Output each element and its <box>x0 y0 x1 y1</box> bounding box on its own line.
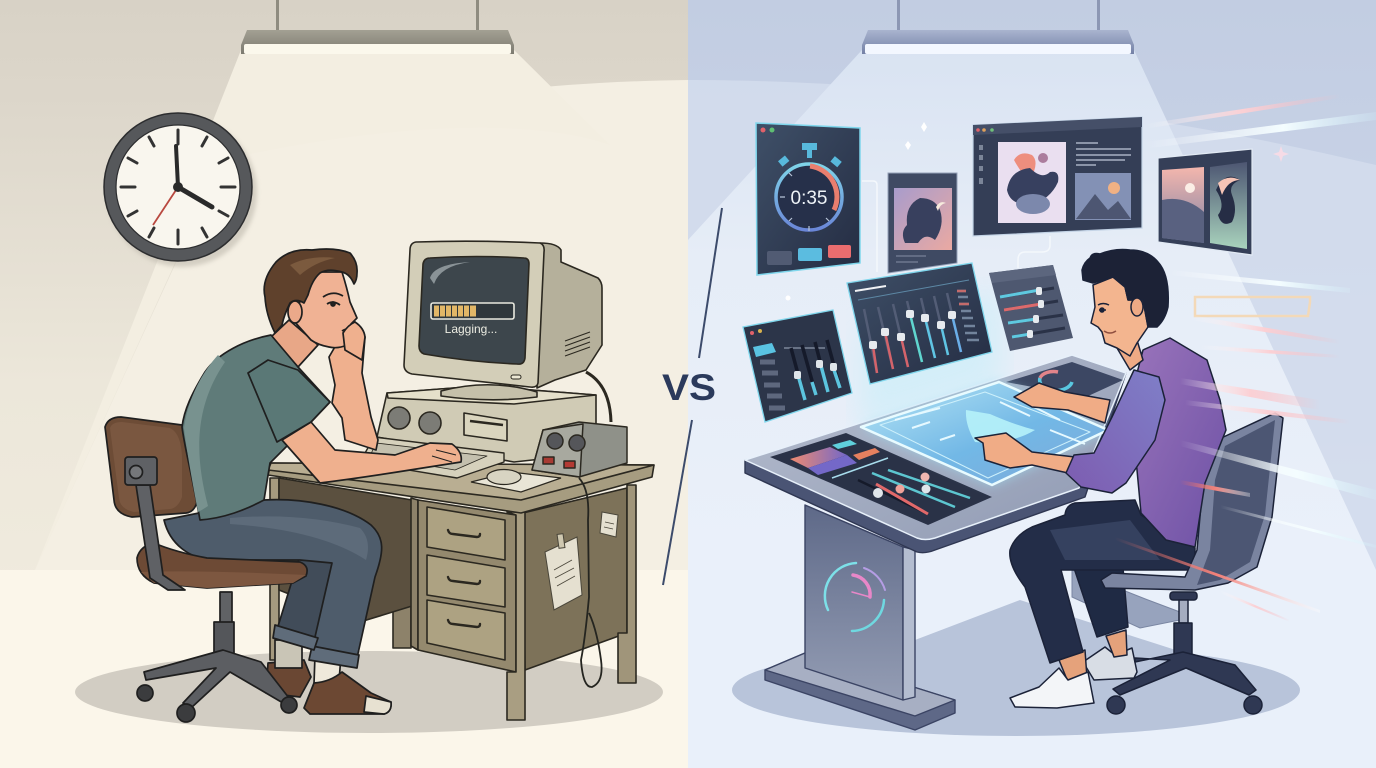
neck <box>1117 340 1143 370</box>
near shoe <box>1010 668 1094 708</box>
timer text: 0:35 <box>791 188 827 209</box>
divider: lower slash <box>663 420 692 585</box>
chair shell <box>1101 413 1283 590</box>
face <box>1091 277 1148 356</box>
ear <box>1131 298 1143 316</box>
control box <box>532 422 627 477</box>
near ankle <box>1059 650 1087 682</box>
computer base unit <box>377 386 596 462</box>
back desk foot <box>1072 570 1180 628</box>
near sock <box>314 655 341 684</box>
chair post <box>136 485 185 590</box>
desk: old wooden desk <box>268 463 654 720</box>
jeans <box>164 500 382 658</box>
faders <box>864 293 961 373</box>
mouth <box>1104 331 1116 333</box>
far leg <box>1074 568 1128 637</box>
hair <box>264 249 357 333</box>
back panel <box>1006 362 1123 397</box>
far leg <box>275 555 336 648</box>
text lines <box>1076 143 1131 165</box>
lamp: right ceiling light <box>862 0 1134 54</box>
near arm <box>975 433 1075 473</box>
hologram beam <box>860 290 1000 430</box>
notes: pinned papers on desk <box>545 512 618 610</box>
raised arm <box>329 322 378 450</box>
desk: holographic console <box>745 290 1126 553</box>
floor shadow: left <box>75 651 663 733</box>
window: image card <box>888 173 957 273</box>
versus label: VS <box>662 367 716 408</box>
eye and brow <box>323 293 343 305</box>
holographic glow <box>861 382 1108 485</box>
mouse and mousepad <box>471 470 561 492</box>
lower arm <box>282 422 461 483</box>
connector lines between windows <box>862 181 1050 272</box>
artwork <box>998 142 1066 223</box>
landscape thumbnail <box>1075 173 1131 220</box>
buttons <box>767 245 851 265</box>
left panel: slow workspace background <box>0 0 688 768</box>
near shoe <box>304 672 391 714</box>
sweater <box>1130 338 1226 547</box>
monitor housing <box>537 243 602 388</box>
progress bar <box>431 303 514 319</box>
window: artwork editor <box>973 117 1142 236</box>
window: stopwatch panel <box>756 123 860 275</box>
stopwatch icon <box>776 143 842 231</box>
person: frustrated man <box>105 249 461 722</box>
pedestal: futuristic desk base <box>765 505 955 730</box>
loading text: Lagging... <box>445 322 497 336</box>
face <box>293 272 357 348</box>
cable: monitor <box>586 372 611 422</box>
window: small sliders panel <box>743 310 852 422</box>
neck <box>271 320 318 367</box>
chair base <box>1107 592 1262 714</box>
sleeve <box>248 360 330 442</box>
window: split art panel <box>1158 149 1252 255</box>
sleeve <box>1066 370 1165 493</box>
desk top <box>745 355 1126 540</box>
far sock <box>275 640 302 668</box>
chair back <box>105 417 198 517</box>
monitor screen <box>419 256 529 364</box>
eye <box>1098 304 1109 310</box>
far ankle <box>1106 630 1127 657</box>
monitor: old CRT <box>404 241 611 422</box>
far arm <box>1014 383 1110 423</box>
desk edge <box>745 373 1126 553</box>
hair <box>1082 250 1168 327</box>
sparkles <box>786 122 1289 300</box>
floor shadow: right <box>732 600 1300 736</box>
monitor stand <box>441 385 537 400</box>
motion streaks <box>1115 94 1376 622</box>
far shoe <box>1083 647 1137 680</box>
ear <box>288 301 302 323</box>
left control panel <box>770 433 992 525</box>
icon: wall clock <box>104 113 257 267</box>
cable: control box to floor <box>579 478 602 687</box>
gauge <box>825 563 885 631</box>
window: setting sliders panel <box>989 265 1073 351</box>
window: mixer panel <box>847 263 992 384</box>
divider: upper slash <box>699 208 722 358</box>
mouth <box>342 329 350 331</box>
lamp: left ceiling light <box>241 0 514 54</box>
right panel: fast workspace background <box>688 0 1376 768</box>
person: focused man <box>975 250 1283 714</box>
holographic screen <box>861 382 1108 485</box>
far shoe <box>266 660 311 697</box>
hand on chin <box>343 322 365 360</box>
chair base <box>137 592 297 722</box>
keyboard <box>360 437 504 478</box>
chair seat <box>137 543 307 588</box>
pants <box>1010 500 1195 663</box>
t-shirt <box>182 335 330 520</box>
